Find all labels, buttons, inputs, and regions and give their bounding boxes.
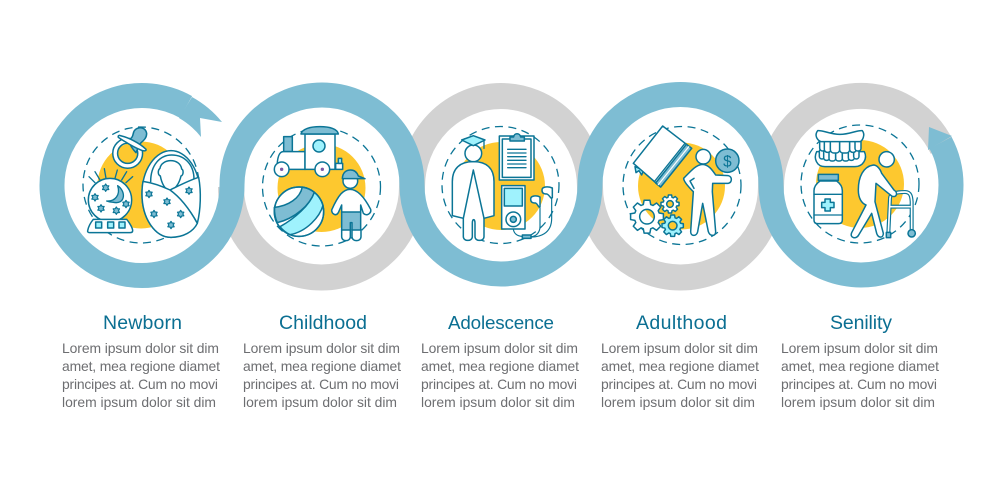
icon: clipboard [499, 134, 534, 180]
text block: amet, mea regione diamet [62, 358, 220, 374]
panel: childhood text [243, 312, 401, 410]
icon: person with coin: $ [723, 153, 732, 170]
panel: newborn icon [83, 127, 200, 243]
text block: principes at. Cum no movi [62, 376, 218, 392]
icon: snow globe [88, 169, 133, 233]
icon: gears [631, 195, 683, 236]
text block: lorem ipsum dolor sit dim [601, 394, 755, 410]
panel: childhood icon [262, 127, 380, 246]
heading: Senility [830, 312, 892, 334]
icon: swaddled baby [142, 151, 200, 237]
grey ribbon [231, 96, 943, 278]
yellow backdrop [638, 142, 725, 230]
dashed circle [623, 126, 741, 244]
yellow backdrop [278, 144, 366, 232]
yellow backdrop [457, 142, 545, 230]
ribbon start notch [179, 97, 222, 137]
icon: ball [274, 187, 324, 236]
text block: lorem ipsum dolor sit dim [62, 394, 216, 410]
heading: Adulthood [636, 312, 727, 334]
heading: Adolescence [448, 312, 554, 333]
text block: lorem ipsum dolor sit dim [421, 394, 575, 410]
icon: elderly person with walker [851, 152, 915, 238]
text block: amet, mea regione diamet [421, 358, 579, 374]
panel: adulthood icon [623, 126, 741, 244]
icon: pacifier [115, 128, 147, 166]
panel: senility text [781, 312, 939, 410]
heading: Newborn [103, 312, 182, 334]
panel: adolescence icon [442, 126, 559, 244]
dashed circle [442, 126, 559, 244]
text block [601, 340, 759, 410]
yellow backdrop [816, 140, 904, 228]
icon: graduate [452, 136, 494, 240]
dashed circle [262, 128, 380, 246]
text block: principes at. Cum no movi [243, 376, 399, 392]
ribbon arrow tip [928, 127, 952, 150]
text block: amet, mea regione diamet [601, 358, 759, 374]
text block: lorem ipsum dolor sit dim [243, 394, 397, 410]
text block: Lorem ipsum dolor sit dim [421, 340, 578, 356]
panel: newborn text [62, 312, 220, 410]
text block [421, 340, 579, 410]
panel: adulthood text [601, 312, 759, 410]
text block: principes at. Cum no movi [601, 376, 757, 392]
text block: amet, mea regione diamet [781, 358, 939, 374]
icon: book [633, 126, 692, 187]
text block [62, 340, 220, 410]
text block [243, 340, 401, 410]
icon: toy train [274, 127, 343, 177]
dashed circle [801, 125, 919, 243]
text block: Lorem ipsum dolor sit dim [781, 340, 938, 356]
icon: medicine bottle [814, 174, 842, 224]
text block: amet, mea regione diamet [243, 358, 401, 374]
text block: principes at. Cum no movi [421, 376, 577, 392]
icon: music player [502, 186, 552, 238]
text block: lorem ipsum dolor sit dim [781, 394, 935, 410]
text block: Lorem ipsum dolor sit dim [62, 340, 219, 356]
text block: Lorem ipsum dolor sit dim [601, 340, 758, 356]
yellow backdrop [98, 142, 184, 228]
blue ribbon [52, 95, 952, 276]
icon: dentures [815, 131, 865, 167]
text block: principes at. Cum no movi [781, 376, 937, 392]
heading: Childhood [279, 312, 367, 334]
panel: senility icon [801, 125, 919, 243]
dashed circle [83, 127, 199, 243]
text block: Lorem ipsum dolor sit dim [243, 340, 400, 356]
icon: boy [332, 170, 371, 241]
text block [781, 340, 939, 410]
panel: adolescence text [421, 312, 579, 410]
